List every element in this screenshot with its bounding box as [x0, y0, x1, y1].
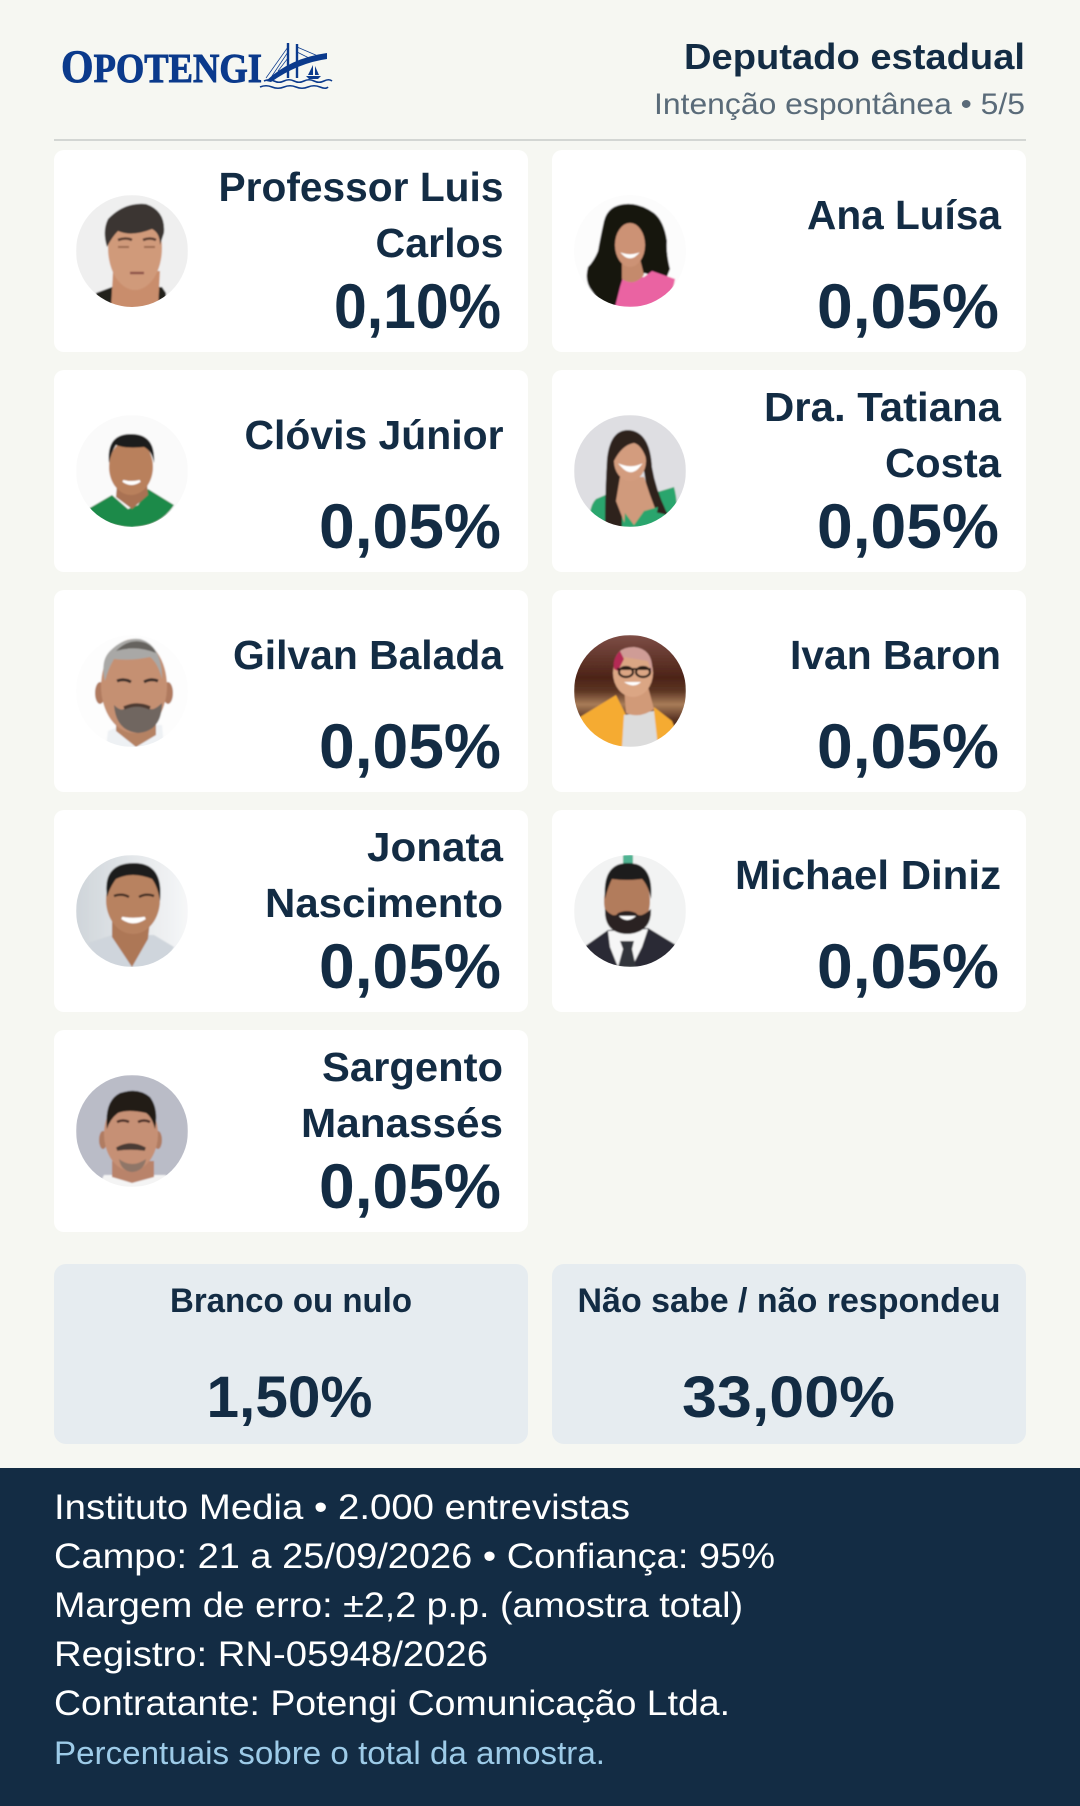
photo: Professor Luis Carlos	[76, 195, 188, 309]
panel: candidate Ivan Baron	[552, 590, 1026, 792]
percentage: 0,05%	[817, 492, 999, 562]
methodology text: Registro: RN-05948/2026	[54, 1635, 488, 1674]
photo: Jonata Nascimento	[76, 855, 188, 967]
percentage: 0,05%	[319, 932, 501, 1002]
candidate name: Ana Luísa	[807, 192, 1002, 238]
panel: candidate Ana Luísa	[552, 150, 1026, 352]
panel: candidate Gilvan Balada	[54, 590, 528, 792]
panel: candidate Dra. Tatiana Costa: Costa	[885, 440, 1002, 486]
header: logo O Potengi	[61, 41, 332, 93]
label: Branco ou nulo	[170, 1282, 412, 1320]
panel: candidate Dra. Tatiana Costa	[552, 370, 1026, 572]
panel: candidate Jonata Nascimento: Nascimento	[265, 880, 503, 926]
panel: candidate Sargento Manassés: Manassés	[301, 1100, 503, 1146]
photo: Ana Luísa	[586, 202, 676, 307]
methodology text: Instituto Media • 2.000 entrevistas	[54, 1488, 630, 1527]
percentage: 0,05%	[817, 932, 999, 1002]
percentage: 0,05%	[817, 712, 999, 782]
panel: candidate Michael Diniz	[552, 810, 1026, 1012]
photo: Sargento Manassés	[76, 1075, 188, 1187]
candidate name: Clóvis Júnior	[244, 412, 504, 458]
methodology text: Margem de erro: ±2,2 p.p. (amostra total)	[54, 1586, 743, 1625]
photo: Ivan Baron	[574, 635, 686, 747]
panel: candidate Clóvis Júnior	[54, 370, 528, 572]
candidate name: Jonata	[367, 824, 504, 870]
panel: Não sabe / não respondeu	[552, 1264, 1026, 1444]
candidate name: Michael Diniz	[735, 852, 1001, 898]
footer: methodology	[0, 1468, 1080, 1806]
subheading: Intenção espontânea • 5/5	[654, 88, 1025, 121]
panel: candidate Professor Luis Carlos: Carlos	[376, 220, 504, 266]
candidate name: Dra. Tatiana	[764, 384, 1002, 430]
percentage: 0,10%	[334, 272, 501, 342]
candidate name: Ivan Baron	[790, 632, 1001, 678]
percentage: 0,05%	[319, 712, 501, 782]
panel: candidate Jonata Nascimento	[54, 810, 528, 1012]
panel: candidate Professor Luis Carlos	[54, 150, 528, 352]
percentage: 33,00%	[682, 1365, 895, 1430]
panel: candidate Sargento Manassés	[54, 1030, 528, 1232]
percentage: 0,05%	[319, 1152, 501, 1222]
methodology text: Campo: 21 a 25/09/2026 • Confiança: 95%	[54, 1537, 775, 1576]
candidate name: Professor Luis	[218, 164, 504, 210]
percentage: 0,05%	[319, 492, 501, 562]
candidate name: Gilvan Balada	[233, 632, 504, 678]
candidate name: Sargento	[322, 1044, 503, 1090]
photo: Gilvan Balada	[94, 638, 174, 747]
logo wordmark: OPOTENGI	[61, 41, 262, 93]
heading: Deputado estadual: Deputado estadual	[684, 36, 1025, 77]
photo: Clóvis Júnior	[89, 432, 175, 527]
percentage: 0,05%	[817, 272, 999, 342]
note: Percentuais sobre o total da amostra.	[54, 1735, 605, 1771]
panel: Branco ou nulo	[54, 1264, 528, 1444]
label: Não sabe / não respondeu	[578, 1282, 1000, 1320]
methodology text	[54, 1488, 775, 1723]
methodology text: Contratante: Potengi Comunicação Ltda.	[54, 1684, 730, 1723]
percentage: 1,50%	[206, 1365, 372, 1430]
photo: Dra. Tatiana Costa	[574, 415, 686, 527]
photo: Michael Diniz	[574, 855, 686, 967]
icon: bridge and sailboat	[260, 43, 332, 88]
